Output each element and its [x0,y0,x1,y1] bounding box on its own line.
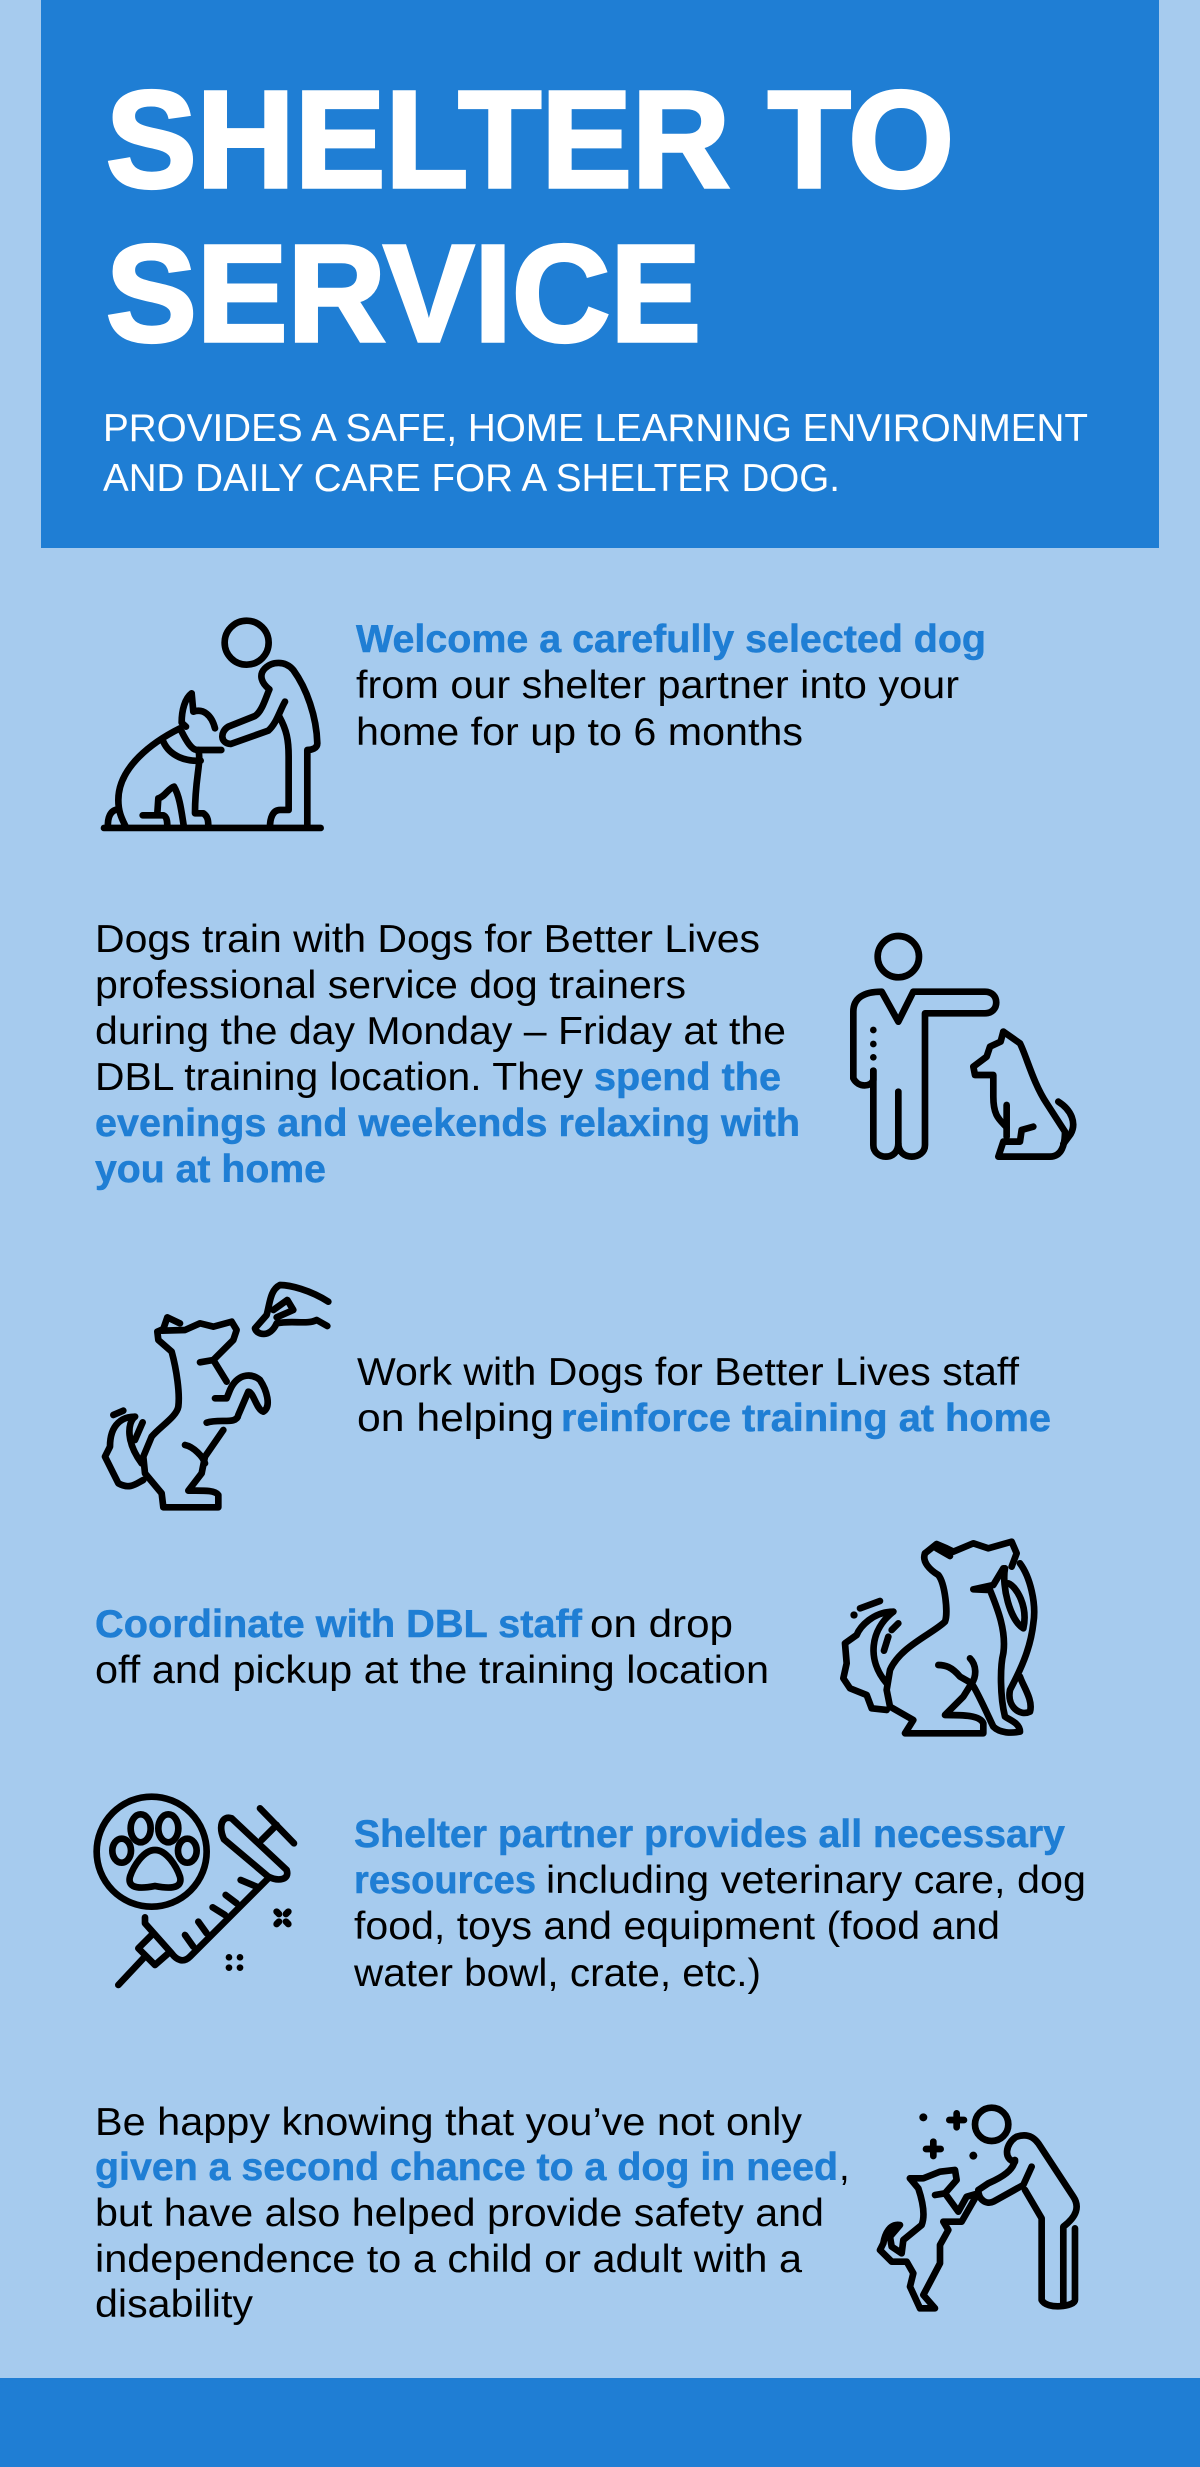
subtitle: PROVIDES A SAFE, HOME LEARNING ENVIRONMENT [103,407,1088,450]
text: shelter partner resources: Shelter partner provides all necessary [354,1813,1066,1856]
icon: trainer pointing at sitting dog [853,936,1073,1157]
text: training [95,918,800,1191]
text: reinforce [357,1351,1051,1440]
text: training: Dogs train with Dogs for Better Lives [95,918,760,961]
text: training: professional service dog trainers [95,964,686,1007]
text: reinforce: reinforce training at home [561,1397,1051,1440]
text: training: evenings and weekends relaxing with [95,1102,800,1145]
text: welcome: from our shelter partner into your [356,664,959,707]
text: reinforce: Work with Dogs for Better Lives staff [357,1351,1019,1394]
title: SHELTER TO [106,63,954,217]
text: shelter partner resources: food, toys and equipment (food and [354,1905,1000,1948]
text: welcome: home for up to 6 months [356,711,803,754]
text: be happy: but have also helped provide safety and [95,2192,824,2235]
text: welcome [356,618,986,754]
footer bar [0,2378,1200,2467]
title: SERVICE [106,217,701,371]
text: shelter partner resources: water bowl, crate, etc.) [353,1952,761,1995]
text: training: during the day Monday – Friday at the [95,1010,786,1053]
text: be happy: , [839,2146,850,2189]
text: coordinate: Coordinate with DBL staff [95,1603,582,1646]
text: training: you at home [95,1148,326,1191]
text: welcome: Welcome a carefully selected dog [356,618,986,661]
text: shelter partner resources: including veterinary care, dog [546,1859,1086,1902]
subtitle: AND DAILY CARE FOR A SHELTER DOG. [103,457,840,500]
subtitle [103,407,1088,500]
icon: person petting seated dog [104,621,321,828]
text: training: DBL training location. They [95,1056,584,1099]
text: be happy: given a second chance to a dog in need [95,2146,838,2189]
text: be happy: Be happy knowing that you’ve not only [95,2101,803,2144]
text: coordinate [95,1603,769,1692]
text: be happy: independence to a child or adult with a [95,2238,803,2281]
icon: paw badge and syringe [97,1797,294,1985]
text: shelter partner resources: resources [354,1859,536,1902]
header panel [41,0,1159,548]
text: training: spend the [594,1056,781,1099]
text: coordinate: on drop [590,1603,733,1646]
text: coordinate: off and pickup at the training location [95,1649,769,1692]
text: shelter partner resources [353,1813,1086,1995]
title [106,63,954,371]
icon: dog begging for treat [105,1285,328,1507]
text: reinforce: on helping [357,1397,554,1440]
text: be happy: disability [95,2283,254,2326]
icon: dog with leash [843,1542,1034,1733]
icon: person greeting jumping dog [880,2108,1077,2308]
text: be happy [95,2101,850,2326]
